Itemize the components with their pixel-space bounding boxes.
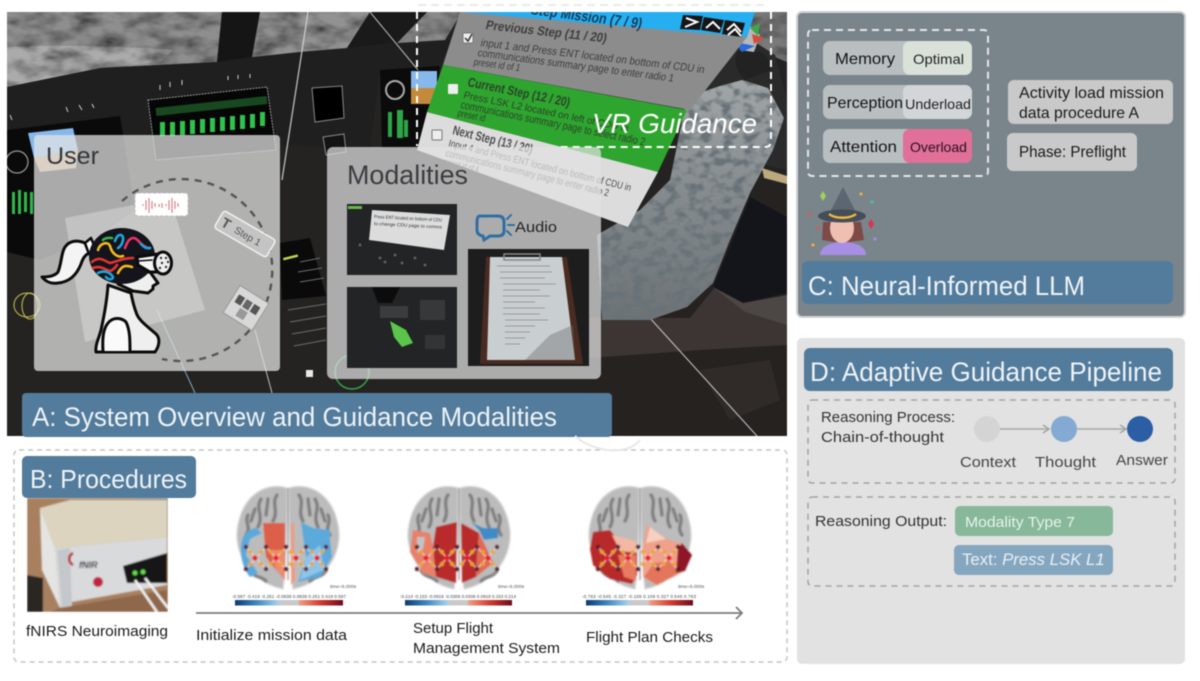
colorbar 1: time=6.000s bbox=[330, 584, 357, 590]
checklist text: Press LSK L2 located on left of CDU in bbox=[462, 90, 630, 135]
reasoning process group bbox=[808, 400, 1175, 483]
node: context: Context bbox=[960, 454, 1017, 471]
A section title bbox=[22, 393, 612, 437]
text step tag: T bbox=[218, 214, 234, 232]
chain arrows bbox=[1000, 425, 1126, 433]
brain map: flight plan checks bbox=[582, 486, 705, 606]
node: context bbox=[960, 416, 1017, 471]
memory state bbox=[823, 41, 972, 75]
VR guidance callout: VR Guidance bbox=[592, 108, 757, 139]
text instruction tag bbox=[954, 545, 1113, 575]
phase box bbox=[1007, 133, 1137, 171]
engine gauges display bbox=[148, 87, 276, 160]
audio wave badge bbox=[135, 193, 188, 216]
perception state bbox=[823, 85, 972, 119]
colorbar 1: -0.587 -0.419 -0.251 -0.0838 0.0838 0.251 0.419 0.587 bbox=[232, 594, 346, 599]
activity context box: Activity load mission bbox=[1019, 85, 1164, 102]
reasoning process group: Reasoning Process: bbox=[821, 409, 955, 426]
activity context box: data procedure A bbox=[1019, 105, 1139, 122]
visual guidance tile bbox=[223, 285, 269, 331]
checklist text: preset id bbox=[456, 108, 486, 125]
colorbar 2: time=6.000s bbox=[498, 584, 525, 590]
dashed modality orbit bbox=[122, 179, 272, 361]
checklist text: Input 4 and Press ENT located on bottom of CDU in bbox=[447, 138, 632, 194]
modalities heading: Modalities bbox=[347, 160, 468, 190]
user card bbox=[34, 135, 280, 371]
colorbar 3: time=6.000s bbox=[678, 584, 705, 590]
brain map: initialize mission data bbox=[232, 486, 357, 606]
pilot in camouflage bbox=[597, 80, 784, 320]
step label: setup: Management System bbox=[413, 640, 560, 657]
timeline arrow bbox=[196, 607, 742, 619]
cognitive state group bbox=[808, 30, 988, 176]
seat and floor bbox=[590, 180, 787, 436]
reasoning process group: Chain-of-thought bbox=[821, 429, 945, 446]
node: thought: Thought bbox=[1035, 454, 1097, 471]
panel A: system overview and guidance modalities bbox=[6, 1, 787, 437]
node: thought bbox=[1035, 416, 1097, 471]
VR checklist panel bbox=[417, 1, 755, 227]
B section title: B: Procedures bbox=[30, 464, 187, 494]
user label: User bbox=[46, 143, 99, 170]
icon: user with neural brain and VR headset bbox=[42, 228, 172, 352]
checklist text: Current Step (12 / 20) bbox=[466, 74, 572, 110]
colorbar 3 bbox=[582, 584, 705, 606]
reasoning output group: Reasoning Output: bbox=[815, 513, 947, 530]
memory state: Optimal bbox=[913, 51, 964, 67]
text step tag: Step 1 bbox=[232, 225, 263, 249]
colorbar 1 bbox=[232, 584, 357, 606]
memory state: Memory bbox=[835, 51, 895, 68]
thumbnail: text instruction bbox=[347, 204, 457, 275]
checklist text: communications summary page to select radio 2 bbox=[459, 99, 646, 149]
fNIRS device photo: fNIR bbox=[79, 560, 98, 570]
modality type tag bbox=[955, 506, 1113, 536]
step label: initialize: Initialize mission data bbox=[196, 627, 348, 644]
fNIRS label: fNIRS Neuroimaging bbox=[26, 623, 168, 640]
modalities card bbox=[327, 147, 601, 379]
audio label: Audio bbox=[515, 219, 557, 236]
D section title: D: Adaptive Guidance Pipeline bbox=[810, 357, 1162, 387]
text instruction tag: Text: Press LSK L1 bbox=[962, 550, 1105, 569]
colorbar 2 bbox=[400, 584, 525, 606]
node: answer bbox=[1116, 416, 1168, 469]
modality type tag: Modality Type 7 bbox=[965, 514, 1075, 531]
checklist text: preset id of 4 bbox=[443, 156, 480, 175]
thumbnail: text instruction: to change CDU page to comms bbox=[374, 221, 443, 230]
node: answer: Answer bbox=[1116, 452, 1168, 469]
A section title: A: System Overview and Guidance Modalities bbox=[32, 402, 557, 432]
attention state: Overload bbox=[910, 139, 967, 155]
checklist text bbox=[443, 1, 706, 199]
checklist text: preset id of 1 bbox=[472, 57, 522, 74]
checklist text: communications summary page to enter radio 1 bbox=[476, 47, 675, 85]
checklist text: Step Mission (7 / 9) bbox=[529, 1, 644, 32]
C section title bbox=[802, 261, 1173, 304]
thumbnail: pointing hand bbox=[347, 287, 457, 368]
perception state: Underload bbox=[905, 96, 971, 112]
checklist text: Next Step (13 / 20) bbox=[451, 122, 535, 157]
attention state: Attention bbox=[830, 139, 897, 156]
icon: witch avatar bbox=[808, 187, 876, 255]
activity context box bbox=[1008, 80, 1173, 124]
step label: checks: Flight Plan Checks bbox=[586, 629, 713, 646]
phase box: Phase: Preflight bbox=[1019, 144, 1127, 161]
panel D: adaptive guidance pipeline bbox=[797, 338, 1185, 664]
right display with attitude indicator bbox=[380, 66, 440, 150]
lower console bbox=[280, 238, 326, 300]
reasoning output group bbox=[808, 497, 1175, 586]
white ray lines bbox=[157, 12, 757, 436]
fNIRS device photo bbox=[27, 498, 168, 612]
C section title: C: Neural-Informed LLM bbox=[808, 271, 1085, 301]
D section title bbox=[804, 348, 1173, 391]
text step tag bbox=[214, 210, 276, 258]
checklist text: communications summary page to enter radio 2 bbox=[444, 148, 610, 199]
checklist text: Previous Step (11 / 20) bbox=[484, 17, 609, 45]
perception state: Perception bbox=[827, 95, 903, 112]
step label: setup: Setup Flight bbox=[413, 620, 494, 637]
colorbar 2: -0.214 -0.153 -0.0919 -0.0306 0.0306 0.0919 0.153 0.214 bbox=[400, 594, 516, 599]
panel B: procedures bbox=[14, 436, 787, 662]
cockpit background photo bbox=[6, 12, 787, 436]
B section title bbox=[22, 456, 196, 498]
checklist text: input 1 and Press ENT located on bottom of CDU in bbox=[479, 37, 706, 76]
left multifunction display bbox=[7, 116, 135, 260]
thumbnail: paper checklist bbox=[468, 249, 589, 366]
VR guidance callout bbox=[417, 5, 771, 147]
brain map: setup flight management system bbox=[400, 486, 525, 606]
colorbar 3: -0.763 -0.545 -0.327 -0.109 0.109 0.327 0.545 0.763 bbox=[582, 594, 696, 599]
panel C: neural-informed LLM bbox=[797, 12, 1185, 317]
thumbnail: text instruction: Press ENT located on bottom of CDU bbox=[374, 214, 442, 223]
icon: audio speech bbox=[477, 215, 514, 240]
attention state bbox=[823, 129, 972, 163]
